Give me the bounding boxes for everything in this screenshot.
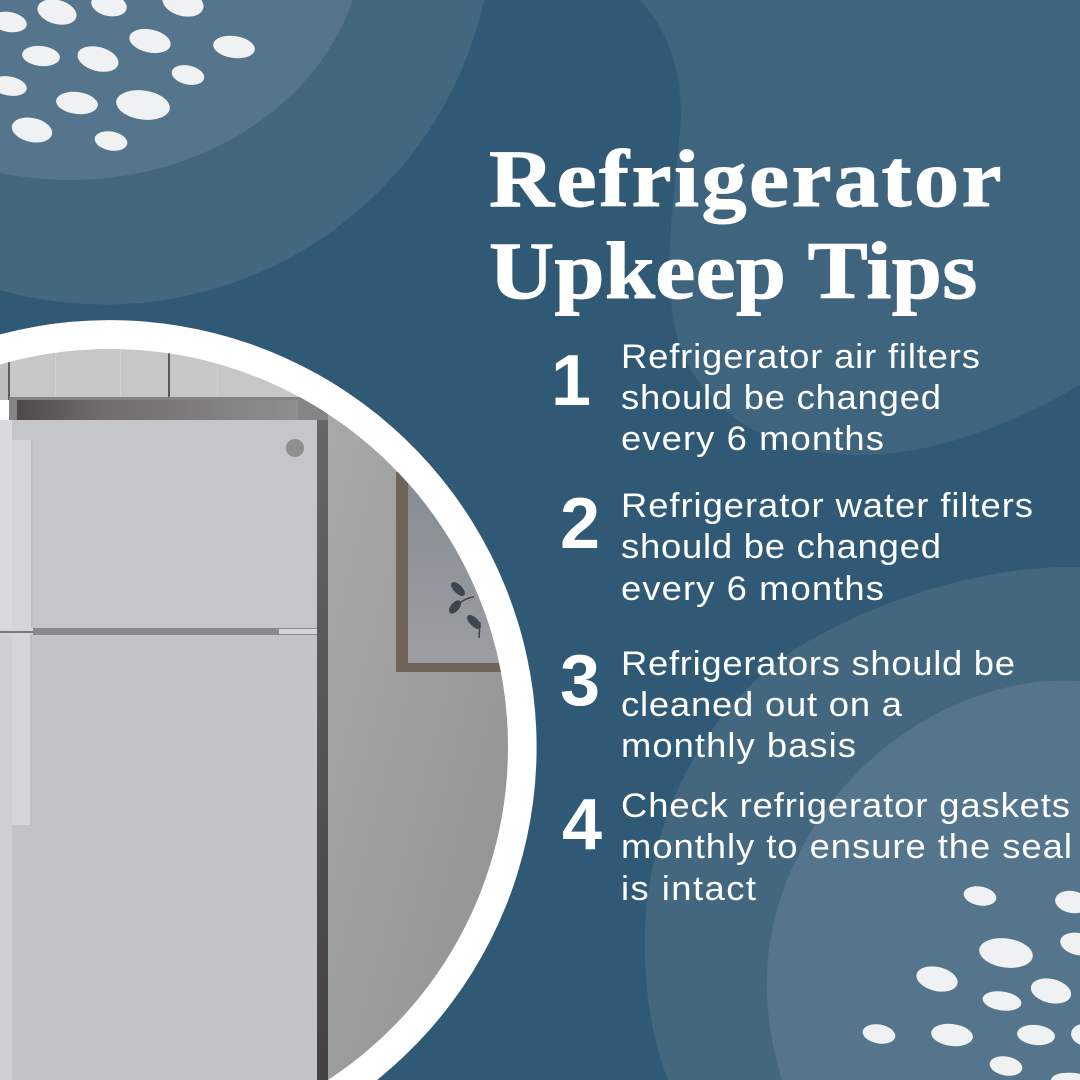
blob: top left inner xyxy=(0,0,353,180)
tip 1 xyxy=(551,338,980,458)
title xyxy=(489,133,1002,316)
decorative dots: bottom right xyxy=(861,884,1080,1080)
tip 3 text: monthly basis xyxy=(621,727,856,765)
decorative dots: top left xyxy=(0,0,256,153)
tip 1 text xyxy=(621,338,980,458)
photo: refrigerator in a kitchen xyxy=(0,340,520,1080)
fridge side shadow xyxy=(317,420,328,1080)
number 1: 1 xyxy=(551,341,591,421)
lower door handle xyxy=(12,635,32,825)
divider between doors xyxy=(0,628,317,635)
fridge upper door xyxy=(0,420,317,628)
tip 1 text: should be changed xyxy=(621,379,941,417)
tip 2 text: should be changed xyxy=(621,528,941,566)
tip 4 text: Check refrigerator gaskets xyxy=(621,787,1070,825)
tip 3 text xyxy=(621,645,1015,765)
blob: bottom right inner xyxy=(767,680,1080,1080)
photo wall xyxy=(328,414,508,1080)
handle edge xyxy=(0,420,12,1080)
tip 4 xyxy=(562,785,1072,908)
leaves in picture xyxy=(448,581,482,638)
fridge lower door xyxy=(0,635,317,1080)
tip 3 xyxy=(560,641,1015,765)
logo xyxy=(286,439,304,457)
tip 2 text: every 6 months xyxy=(621,570,884,608)
tip 2 text: Refrigerator water filters xyxy=(621,487,1033,525)
tip 4 text xyxy=(621,787,1072,908)
number 2: 2 xyxy=(560,484,600,564)
upper door handle xyxy=(12,440,33,628)
tip 3 text: cleaned out on a xyxy=(621,686,902,724)
tip 3 text: Refrigerators should be xyxy=(621,645,1015,683)
blob: top right xyxy=(640,0,1080,455)
title: Refrigerator xyxy=(489,133,1002,224)
tip 4 text: monthly to ensure the seal xyxy=(621,828,1072,866)
tip 2 xyxy=(560,484,1033,608)
recess above fridge xyxy=(9,397,328,421)
tip 2 text xyxy=(621,487,1033,608)
photo ring xyxy=(0,320,537,1080)
tip 1 text: every 6 months xyxy=(621,420,884,458)
tip 4 text: is intact xyxy=(621,870,756,908)
title: Upkeep Tips xyxy=(489,225,977,316)
tip 1 text: Refrigerator air filters xyxy=(621,338,980,376)
number 4: 4 xyxy=(562,785,602,865)
blob: bottom right outer xyxy=(645,567,1080,1080)
blob: top left outer xyxy=(0,0,484,305)
wall panels above fridge xyxy=(0,349,304,400)
framed picture xyxy=(396,472,501,672)
number 3: 3 xyxy=(560,641,600,721)
